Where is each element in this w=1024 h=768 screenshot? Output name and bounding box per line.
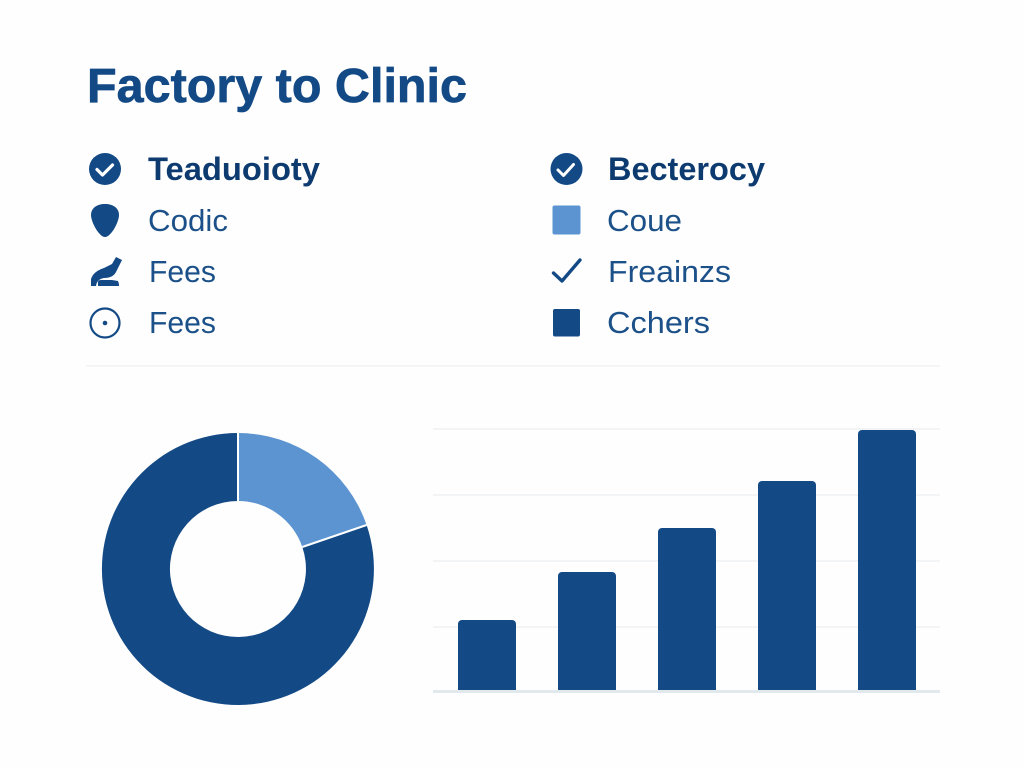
bar 3	[658, 528, 716, 690]
donut chart	[102, 433, 374, 705]
label: Fees: Fees	[149, 305, 216, 340]
icon: check badge	[89, 153, 121, 185]
icon: light square	[552, 206, 580, 234]
heading: Teaduoioty: Teaduoioty	[148, 151, 320, 187]
donut: dark segment	[102, 433, 374, 705]
icon: tool	[91, 257, 122, 286]
icon: check mark	[554, 260, 580, 281]
panel: right list	[550, 151, 765, 340]
label: Cchers: Cchers	[607, 305, 710, 340]
label: Coue: Coue	[607, 203, 682, 238]
title: Factory to Clinic	[87, 60, 467, 113]
label: Fees: Fees	[149, 254, 216, 289]
bar 2	[558, 572, 616, 690]
donut: light segment	[238, 433, 367, 547]
icon: check badge	[550, 153, 582, 185]
icon: target circle	[90, 308, 120, 338]
label: Codic: Codic	[148, 203, 228, 238]
heading: Becterocy: Becterocy	[608, 151, 765, 187]
label: Freainzs: Freainzs	[608, 254, 731, 289]
bar 4	[758, 481, 816, 690]
bar chart	[433, 429, 940, 692]
icon: dark square	[553, 309, 580, 336]
icon: drop	[91, 204, 119, 237]
bar 5	[858, 430, 916, 690]
bar 1	[458, 620, 516, 690]
panel: left list	[89, 151, 320, 340]
